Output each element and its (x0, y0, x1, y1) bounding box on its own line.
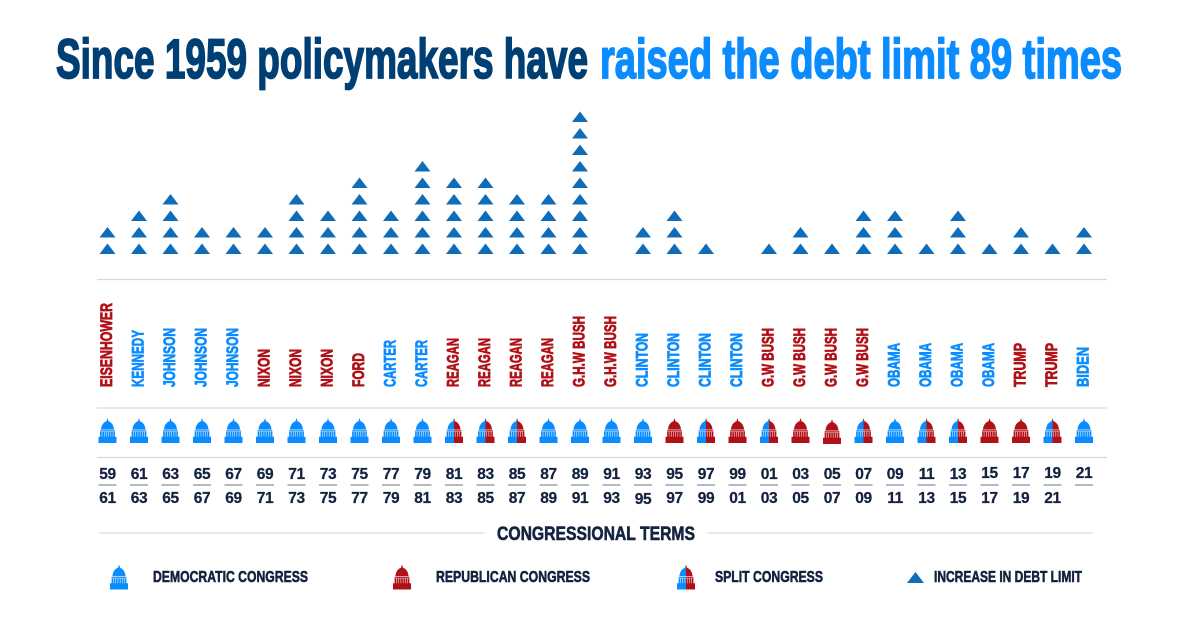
legend (110, 564, 1082, 590)
president names: NIXON (254, 349, 274, 387)
term years: 93 (603, 490, 620, 507)
term years: 67 (225, 466, 242, 483)
president names: REAGAN (475, 338, 494, 387)
president names: JOHNSON (223, 328, 242, 387)
legend: democratic congress (110, 564, 308, 590)
term years: 21 (1044, 490, 1061, 507)
term years: 01 (729, 490, 746, 507)
president names: OBAMA (948, 343, 966, 387)
term years: 99 (729, 466, 746, 483)
term years: 13 (950, 466, 967, 483)
term years: 61 (131, 466, 148, 483)
president names: G.W BUSH (853, 328, 872, 387)
president names: G.W BUSH (822, 328, 840, 387)
president names: OBAMA (916, 343, 935, 387)
term years: 97 (698, 466, 714, 483)
term years: 75 (351, 466, 368, 483)
president names: CLINTON (727, 333, 746, 387)
term years: 85 (477, 490, 494, 507)
president names: REAGAN (538, 338, 557, 387)
president names: G.H.W BUSH (601, 316, 620, 387)
term years: 81 (446, 466, 463, 483)
term years: 69 (257, 466, 274, 483)
term years: 19 (1044, 465, 1061, 482)
term years (98, 465, 1093, 508)
president names: CARTER (412, 340, 431, 387)
term years: 61 (99, 490, 116, 507)
term years: 75 (320, 490, 337, 507)
term years: 81 (414, 490, 431, 507)
term years: 21 (1076, 465, 1093, 482)
president names: REAGAN (506, 338, 526, 387)
term years: 01 (761, 466, 778, 483)
term years: 05 (792, 490, 809, 507)
term years: 17 (1013, 465, 1029, 482)
term years: 13 (918, 490, 935, 507)
term years: 71 (257, 490, 274, 507)
president names: NIXON (286, 349, 305, 387)
term years: 93 (635, 466, 652, 483)
icons: party control of Congress per term (98, 418, 1093, 444)
president names: EISENHOWER (97, 303, 116, 387)
term years: 07 (824, 490, 840, 507)
term years: 83 (446, 490, 463, 507)
president names: G.H.W BUSH (570, 316, 588, 387)
title: Since 1959 policymakers have (56, 27, 588, 90)
president names: BIDEN (1074, 347, 1092, 387)
chart: debt limit increases per congressional term (100, 112, 1092, 254)
legend: increase in debt limit: INCREASE IN DEBT LIMIT (934, 569, 1082, 586)
term years: 73 (288, 490, 305, 507)
president names: TRUMP (1042, 343, 1061, 387)
term years: 17 (981, 490, 998, 507)
legend: democratic congress: DEMOCRATIC CONGRESS (153, 569, 308, 586)
term years: 67 (194, 490, 210, 507)
term years: 15 (981, 465, 998, 482)
term years: 89 (540, 490, 557, 507)
president names: JOHNSON (160, 328, 179, 387)
legend: republican congress: REPUBLICAN CONGRESS (436, 569, 590, 586)
president names: CARTER (380, 340, 400, 387)
president names: FORD (349, 353, 368, 387)
term years: 77 (351, 490, 368, 507)
term years: 69 (225, 490, 242, 507)
president names: CLINTON (632, 333, 652, 387)
term years: 71 (288, 466, 305, 483)
legend: republican congress (393, 564, 590, 590)
president names: OBAMA (979, 343, 998, 387)
term years: 09 (855, 490, 872, 507)
term years: 65 (162, 490, 179, 507)
term years: 91 (572, 490, 589, 507)
term years: 09 (887, 466, 904, 483)
term years: 97 (666, 490, 683, 507)
term years: 05 (824, 466, 841, 483)
president names: CLINTON (664, 333, 683, 387)
president names: NIXON (318, 349, 336, 387)
legend: split congress (677, 564, 823, 590)
president names: REAGAN (444, 338, 462, 387)
president names: JOHNSON (192, 328, 210, 387)
term years: 73 (320, 466, 337, 483)
term years: 03 (792, 466, 809, 483)
president names: G.W BUSH (758, 328, 778, 387)
term years: 99 (698, 490, 715, 507)
legend: split congress: SPLIT CONGRESS (715, 569, 823, 586)
president names: OBAMA (884, 343, 904, 387)
term years: 87 (540, 466, 557, 483)
president names (97, 303, 1092, 387)
term years: 85 (509, 466, 526, 483)
term years: 77 (383, 466, 399, 483)
term years: 59 (99, 466, 116, 483)
term years: 79 (383, 490, 400, 507)
term years: 65 (194, 466, 211, 483)
president names: KENNEDY (128, 330, 148, 387)
legend: increase in debt limit (907, 569, 1082, 586)
term years: 15 (950, 490, 967, 507)
term years: 89 (572, 466, 589, 483)
term years: 87 (509, 490, 525, 507)
term years: 63 (162, 466, 179, 483)
president names: G.W BUSH (790, 328, 809, 387)
term years: 83 (477, 466, 494, 483)
term years: 95 (666, 466, 683, 483)
president names: TRUMP (1010, 343, 1030, 387)
term years: 91 (603, 466, 620, 483)
term years: 95 (635, 491, 652, 508)
term years: 07 (855, 466, 872, 483)
term years: 79 (414, 466, 431, 483)
president names: CLINTON (696, 333, 714, 387)
heading: congressional terms: CONGRESSIONAL TERMS (497, 524, 695, 545)
term years: 11 (919, 466, 935, 483)
term years: 63 (131, 490, 148, 507)
term years: 19 (1013, 490, 1030, 507)
term years: 11 (887, 490, 904, 507)
term years: 03 (761, 490, 778, 507)
